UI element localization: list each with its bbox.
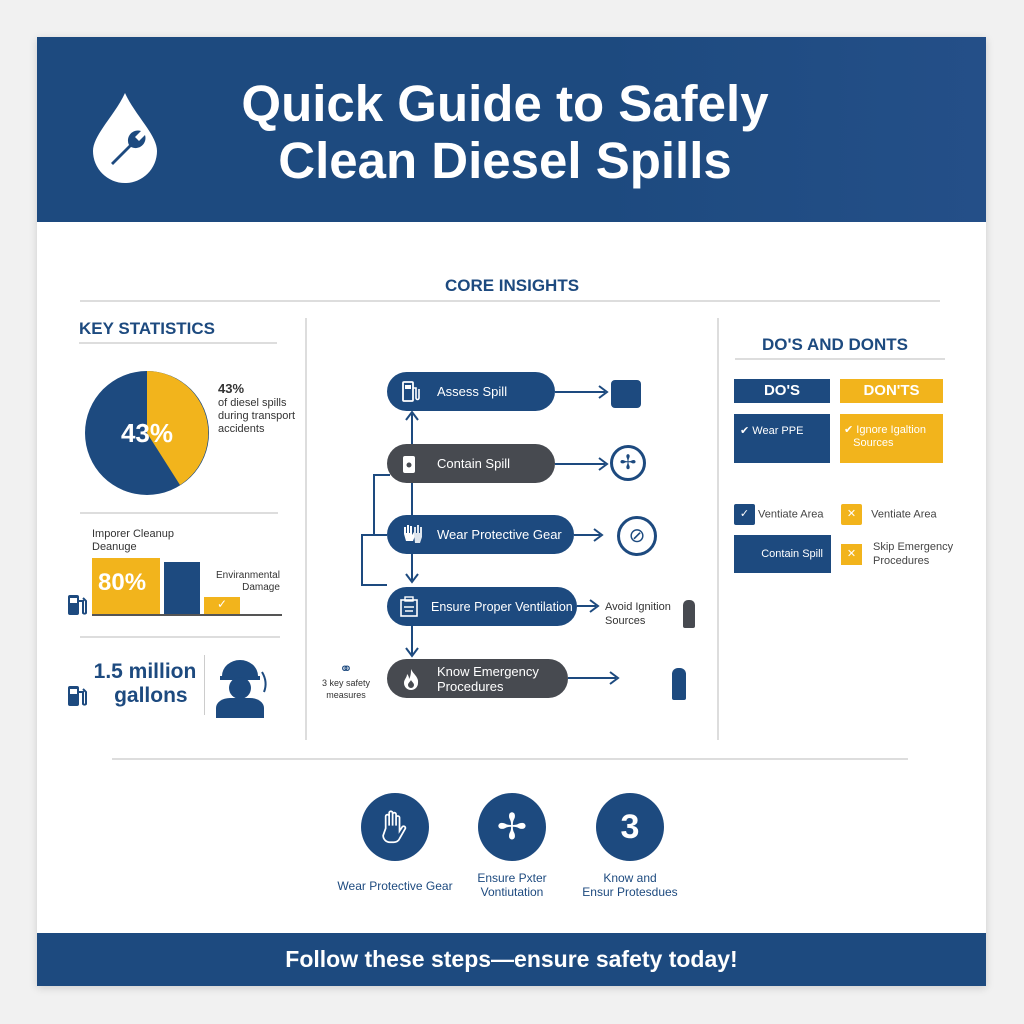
do header [734, 379, 830, 403]
text: avoid ignition [605, 601, 671, 627]
pie label [218, 381, 295, 435]
summary: ventilation: Ensure Pxter [477, 871, 547, 885]
step: know emergency procedures [387, 659, 568, 698]
stat: 1.5 million gallons: 1.5 million [94, 660, 196, 683]
dont: ventilate [841, 504, 937, 525]
dont: skip: Skip Emergency Procedures [873, 541, 953, 567]
label: 3 key safety measures: 3 key safety [322, 678, 370, 688]
pie label: during transport [218, 410, 295, 422]
do: ventilate [734, 504, 824, 525]
summary: ventilation [477, 793, 547, 899]
dont header [840, 379, 943, 403]
title [241, 75, 769, 189]
dont header: DON'TS [863, 382, 920, 399]
stat: 1.5 million gallons: gallons [114, 684, 188, 707]
step: ensure ventilation: Ensure Proper Ventilation [431, 600, 573, 614]
summary: wear protective gear [337, 793, 453, 893]
summary: 3: 3 [621, 808, 639, 846]
footer banner: Follow these steps—ensure safety today! [285, 946, 738, 972]
pie chart: 43% [121, 418, 173, 448]
dont item: ✔ Ignore Igaltion [844, 424, 926, 436]
icon: worker [216, 660, 267, 718]
label: 3 key safety measures [322, 661, 370, 700]
icon: no fire [617, 516, 657, 556]
step: assess spill [387, 372, 555, 411]
summary: 3 [582, 793, 678, 899]
bar chart: 80% [98, 569, 146, 596]
step: contain spill [387, 444, 555, 483]
bar chart: ✓ [217, 597, 227, 611]
panel: dos and donts [734, 335, 954, 573]
title: Clean Diesel Spills [278, 132, 732, 189]
step: ensure ventilation [387, 587, 577, 626]
icon: fuel pump [68, 686, 87, 706]
text: avoid ignition: Avoid Ignition [605, 601, 671, 613]
bar chart [68, 528, 282, 616]
dont item [840, 414, 943, 463]
do: ventilate: Ventiate Area [758, 508, 824, 520]
label: 3 key safety measures: measures [326, 690, 366, 700]
dont: ventilate: ✕ [847, 508, 856, 520]
pie label: of diesel spills [218, 397, 286, 409]
do: ventilate: ✓ [740, 508, 749, 520]
icon: fan: ✢ [620, 452, 636, 474]
pie label: 43% [218, 381, 244, 396]
step: assess spill: Assess Spill [437, 384, 507, 399]
summary: ventilation: Vontiutation [481, 885, 543, 899]
text: avoid ignition: Sources [605, 615, 645, 627]
bar chart: Deanuge [92, 541, 137, 553]
dont item: Sources [853, 437, 894, 449]
bar chart: Enviranmental [216, 570, 280, 581]
dont: skip: ✕ [847, 548, 856, 560]
step: contain spill: Contain Spill [437, 456, 510, 471]
title: Quick Guide to Safely [241, 75, 769, 132]
bar chart: Imporer Cleanup [92, 528, 174, 540]
step: know emergency procedures: Know Emergency [437, 664, 539, 678]
summary: 3: Know and [603, 871, 657, 885]
summary: 3: Ensur Protesdues [582, 885, 678, 899]
step: wear protective gear [387, 515, 574, 554]
panel: key statistics [68, 319, 295, 718]
dont: ventilate: Ventiate Area [871, 508, 937, 520]
footer banner [37, 933, 986, 986]
do item: ✔ Wear PPE [740, 425, 803, 437]
pie chart [85, 371, 209, 495]
summary: ventilation: ✢ [497, 806, 527, 847]
do: contain spill: Contain Spill [761, 548, 823, 560]
do item [734, 414, 830, 463]
icon: fan [610, 445, 646, 481]
summary: wear protective gear: Wear Protective Gear [337, 879, 453, 893]
pie label: accidents [218, 423, 264, 435]
do: contain spill [734, 535, 831, 573]
icon: drop with wrench [93, 93, 157, 183]
do header: DO'S [764, 382, 800, 399]
icon: extinguishers [683, 600, 695, 628]
bar chart: Damage [242, 582, 280, 593]
icon: kit [611, 380, 641, 408]
heading: DO'S AND DONTS [762, 335, 908, 354]
icon: fuel pump [68, 595, 87, 615]
label: 3 key safety measures: ⚭ [339, 661, 353, 678]
step: wear protective gear: Wear Protective Gear [437, 527, 562, 542]
step: know emergency procedures: Procedures [437, 678, 503, 694]
stat: 1.5 million gallons [94, 660, 196, 707]
heading: KEY STATISTICS [79, 319, 215, 338]
flowchart connectors [361, 385, 620, 685]
header banner [37, 37, 986, 222]
icon: no fire: ⊘ [629, 525, 645, 547]
heading: core insights: CORE INSIGHTS [445, 276, 579, 295]
